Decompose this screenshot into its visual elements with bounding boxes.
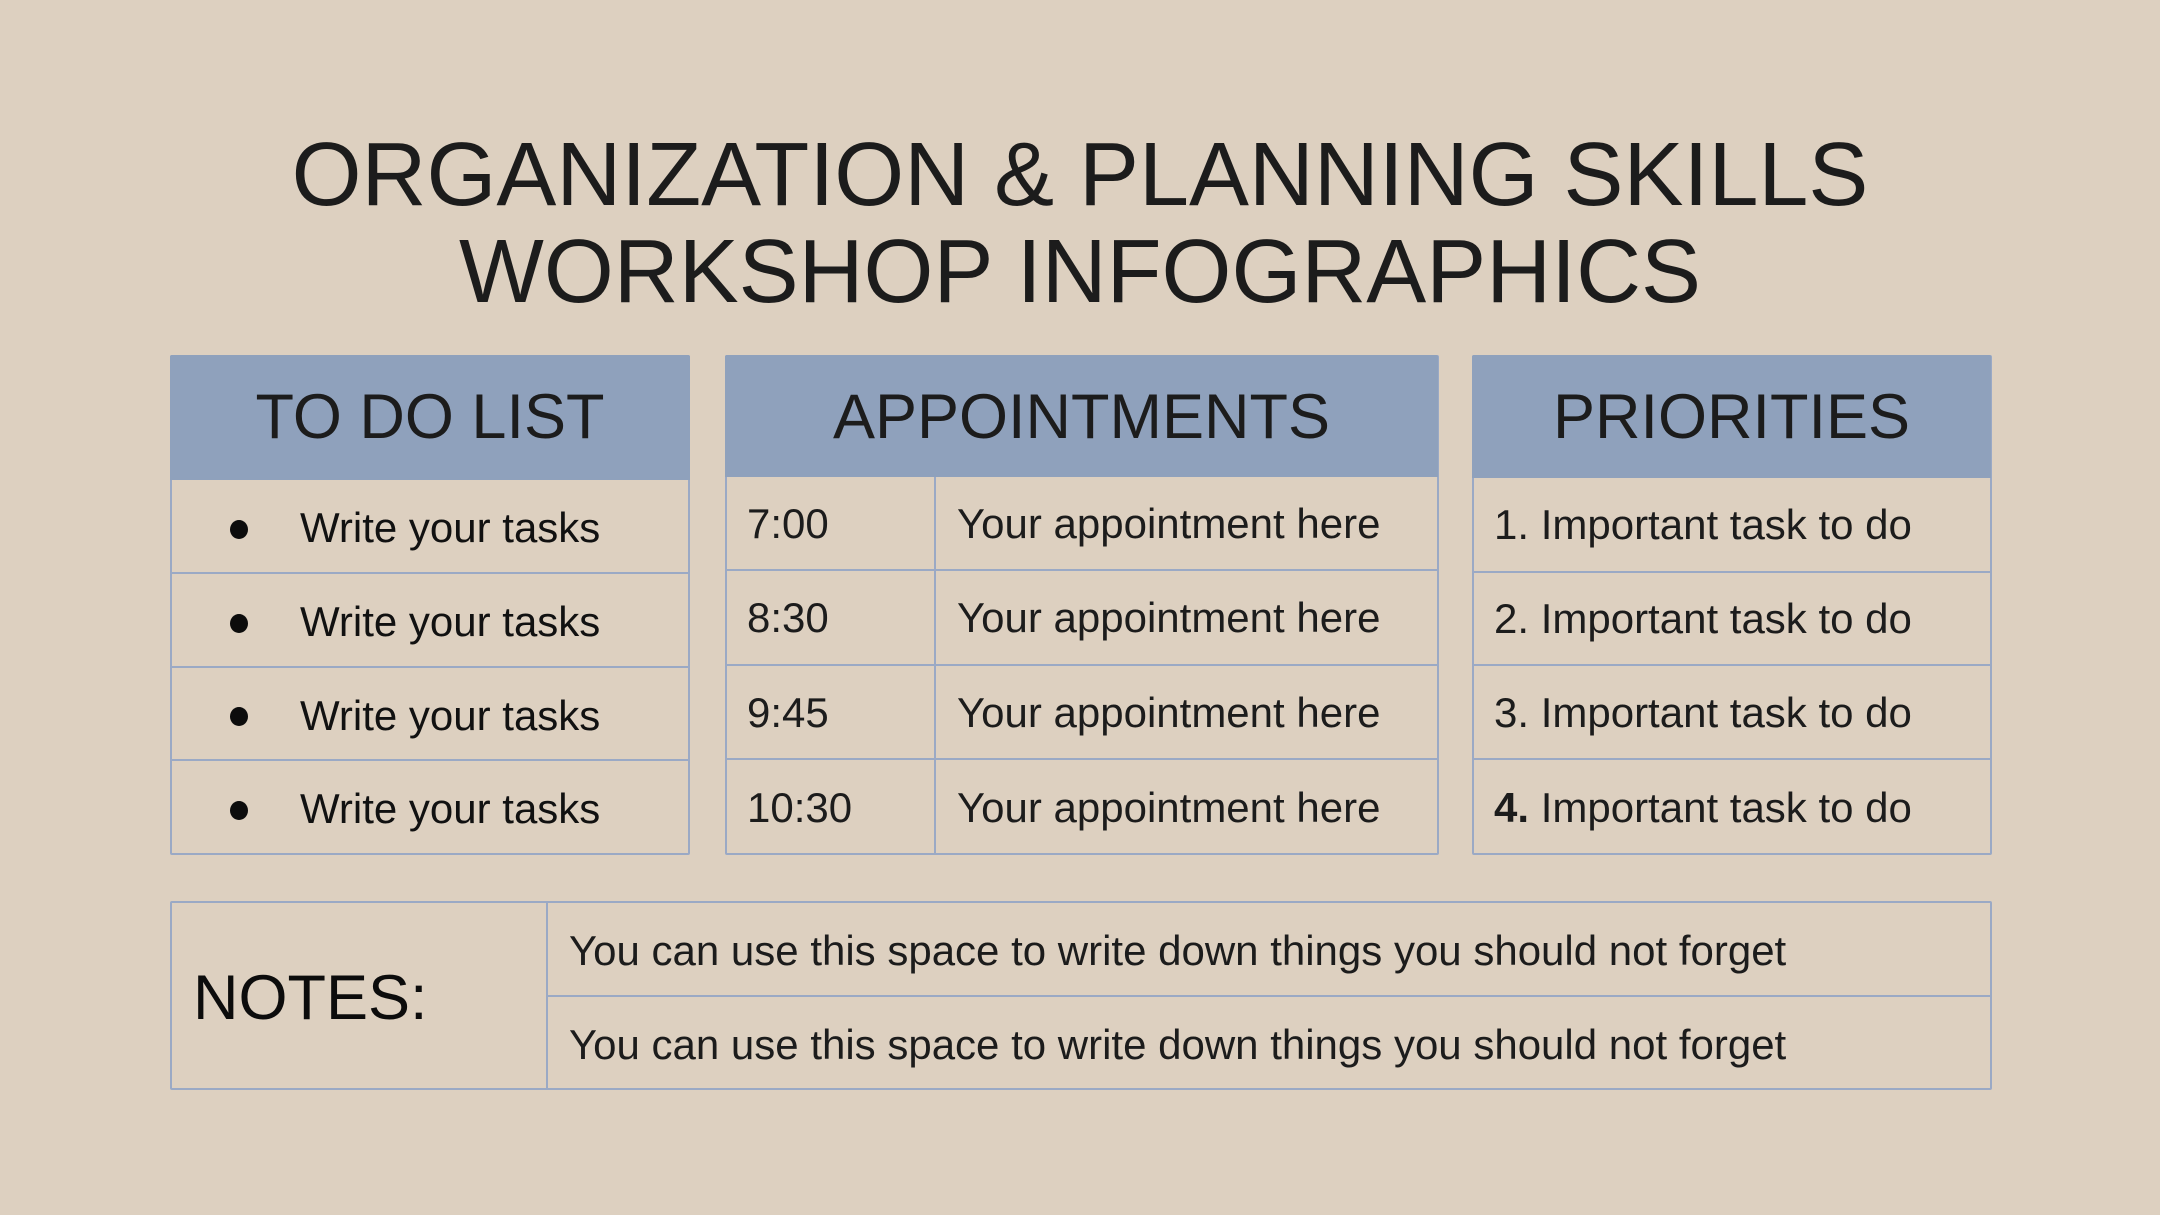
title: ORGANIZATION & PLANNING SKILLS xyxy=(292,125,1868,225)
heading: priorities: PRIORITIES xyxy=(1553,382,1910,452)
heading: to do list: TO DO LIST xyxy=(256,382,604,452)
note line 2: You can use this space to write down things you should not forget xyxy=(569,1021,1786,1068)
panel: notes xyxy=(170,901,1992,1090)
heading: appointments: APPOINTMENTS xyxy=(833,382,1330,452)
title: WORKSHOP INFOGRAPHICS xyxy=(459,222,1701,322)
priority row 1: 1. Important task to do xyxy=(1494,501,1912,548)
appointment row 3 xyxy=(747,689,1380,736)
appointment row 2: 8:30 xyxy=(747,594,829,641)
appointment row 1 xyxy=(747,500,1380,547)
appointment row 4 xyxy=(747,784,1380,831)
appointment row 1: 7:00 xyxy=(747,500,829,547)
task row 3: Write your tasks xyxy=(300,692,600,739)
heading: appointments xyxy=(725,355,1438,477)
heading: priorities xyxy=(1472,355,1991,478)
appointment row 2 xyxy=(747,594,1380,641)
appointment row 3: Your appointment here xyxy=(957,689,1380,736)
task row 1: Write your tasks xyxy=(300,504,600,551)
notes label: NOTES: xyxy=(193,963,428,1033)
appointment row 3: 9:45 xyxy=(747,689,829,736)
priority row 4: 4. Important task to do xyxy=(1494,784,1912,831)
priority row 2: 2. Important task to do xyxy=(1494,595,1912,642)
appointment row 4: 10:30 xyxy=(747,784,852,831)
panel: to do list xyxy=(170,355,690,855)
note line 1: You can use this space to write down things you should not forget xyxy=(569,927,1786,974)
appointment row 1: Your appointment here xyxy=(957,500,1380,547)
appointment row 4: Your appointment here xyxy=(957,784,1380,831)
priority row 3: 3. Important task to do xyxy=(1494,689,1912,736)
task row 4: Write your tasks xyxy=(300,785,600,832)
heading: to do list xyxy=(170,355,690,480)
panel: priorities xyxy=(1472,355,1992,855)
appointment row 2: Your appointment here xyxy=(957,594,1380,641)
panel: appointments xyxy=(725,355,1439,855)
title xyxy=(292,125,1868,322)
task row 2: Write your tasks xyxy=(300,598,600,645)
